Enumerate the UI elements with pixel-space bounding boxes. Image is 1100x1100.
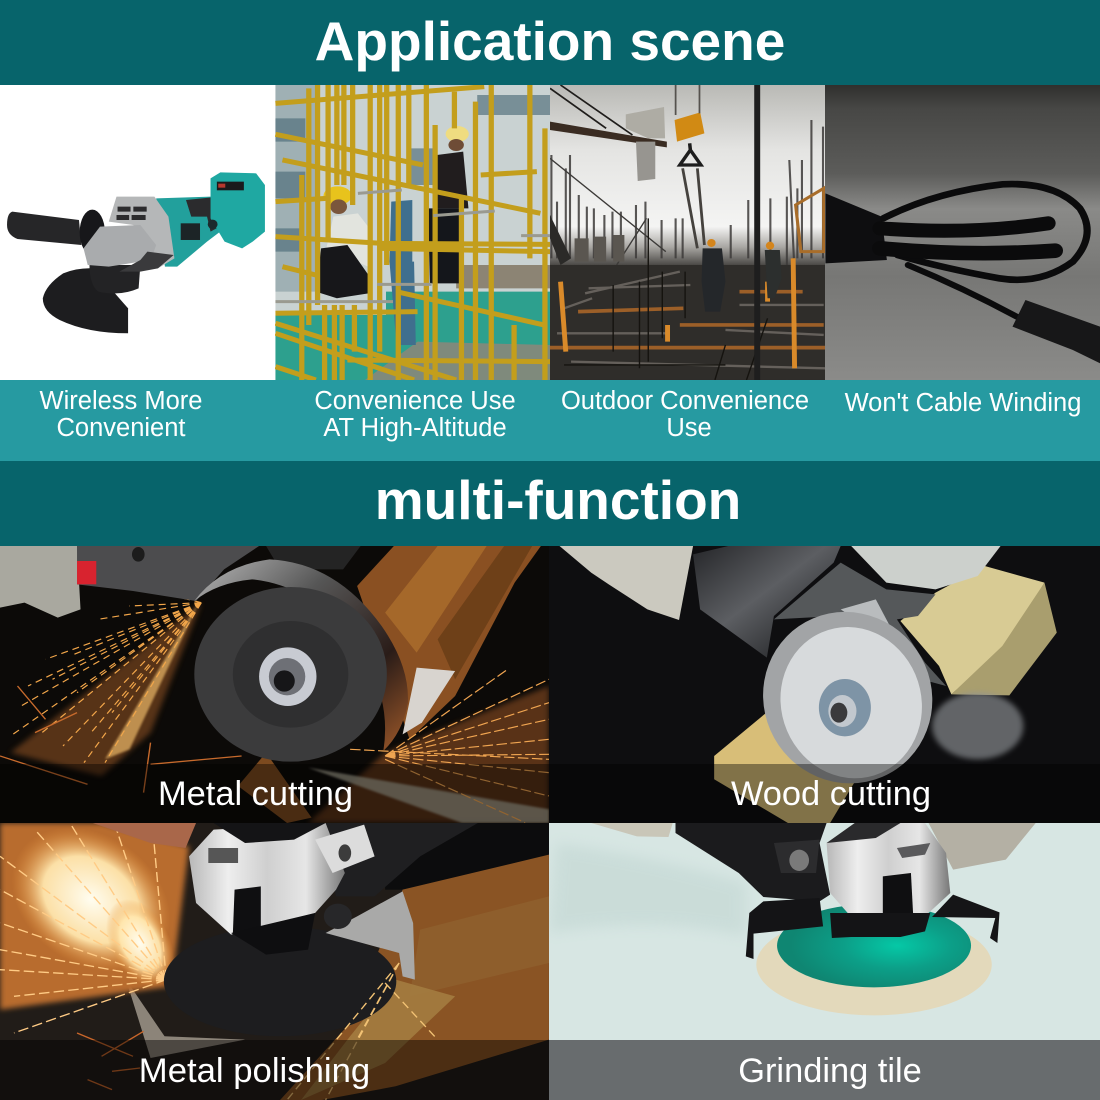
icon: seated worker — [320, 186, 368, 298]
panel: metal cutting photo — [0, 546, 549, 823]
icon: grinder head chrome — [827, 823, 950, 913]
icon: glove — [0, 546, 81, 618]
icon: motor housing — [77, 546, 259, 601]
icon: logo tag — [181, 223, 200, 240]
icon: grinder body — [676, 823, 830, 901]
icon: yellow lifting clamp — [675, 112, 704, 142]
icon: spindle and screws — [231, 913, 315, 955]
icon: white disc — [746, 597, 949, 798]
icon: worker in middle — [389, 200, 416, 345]
caption: Grinding tile: Grinding tile — [738, 1052, 922, 1090]
icon: flange — [80, 210, 104, 250]
icon: gear head lower — [84, 225, 156, 267]
icon: lower wood block — [714, 709, 858, 823]
sparks left — [11, 589, 201, 763]
header band: multi-function: multi-function — [375, 469, 741, 531]
panel: wood cutting photo — [549, 546, 1100, 823]
icon: workers on deck — [702, 239, 782, 312]
icon: spindle — [89, 265, 140, 294]
sparks right — [350, 669, 549, 823]
rebar deck — [550, 265, 825, 380]
icon: wheel guard — [43, 268, 128, 333]
caption: Won't Cable Winding: Won't Cable Winding — [845, 389, 1081, 417]
icon: scaffold tower — [796, 188, 824, 252]
sparks right — [287, 963, 438, 1100]
icon: cable coil — [825, 184, 1087, 317]
icon: distant columns — [575, 235, 624, 262]
caption: Wireless More Convenient: Convenient — [56, 414, 186, 442]
caption: Metal cutting: Metal cutting — [158, 775, 353, 813]
spark fan — [0, 823, 189, 1010]
icon: standing worker — [428, 126, 469, 283]
icon: dust cloud — [932, 693, 1023, 759]
caption band — [0, 380, 1100, 461]
caption: Convenience Use AT High-Altitude: AT High-Altitude — [323, 414, 507, 442]
icon: grinder head chrome — [189, 823, 375, 935]
icon: gear head upper with vents — [109, 197, 174, 268]
icon: glove left — [560, 546, 693, 620]
icon: steel beam — [357, 546, 541, 739]
caption: Wood cutting: Wood cutting — [731, 775, 931, 813]
soft shadow on tile — [549, 843, 746, 936]
icon: guard right — [932, 895, 999, 943]
icon: motor housing — [693, 546, 841, 658]
spark glow — [11, 603, 201, 776]
icon: display — [217, 182, 244, 190]
icon: tall black pole — [754, 85, 760, 380]
caption: Outdoor Convenience Use: Outdoor Convenience — [561, 387, 809, 415]
icon: glove right — [929, 823, 1036, 870]
icon: rusty steel plate — [280, 855, 549, 1100]
header band: Application scene — [0, 0, 1100, 85]
icon: glove right — [851, 546, 1001, 589]
icon: felt polishing pad — [756, 904, 992, 1015]
panel: metal polishing photo — [0, 798, 549, 1100]
icon: concrete block — [626, 107, 665, 138]
caption: Metal polishing: Metal polishing — [139, 1052, 370, 1090]
caption: Convenience Use AT High-Altitude: Convenience Use — [314, 387, 516, 415]
icon: bare metal corner — [126, 980, 245, 1058]
rebar forest — [550, 120, 824, 265]
caption: Wireless More Convenient: Wireless More — [40, 387, 202, 415]
icon: upper wood block — [900, 566, 1057, 695]
panel: cordless angle grinder product photo — [7, 172, 265, 334]
icon: guard left — [746, 898, 823, 959]
icon: teal motor body — [156, 196, 219, 267]
icon: neck dark — [315, 823, 478, 896]
icon: dusty guard — [774, 563, 946, 686]
icon: battery housing — [211, 172, 265, 248]
icon: disc guard rim — [194, 559, 408, 751]
header band: Application scene: Application scene — [315, 10, 785, 72]
icon: cutting disc — [194, 587, 387, 762]
icon: hook triangle — [680, 143, 701, 165]
panel: grinding tile photo — [549, 823, 1100, 1100]
workers — [316, 126, 469, 345]
icon: strain relief connector — [1012, 300, 1100, 363]
panel: scaffolding high-altitude photo — [275, 85, 551, 380]
panel: black power cable photo — [825, 85, 1100, 380]
icon: glove edge — [93, 823, 196, 848]
caption: Outdoor Convenience Use: Use — [666, 414, 712, 442]
panel: outdoor construction site photo — [550, 85, 825, 380]
icon: spindle collar — [830, 913, 930, 938]
header band: multi-function — [0, 461, 1100, 546]
icon: guard silver — [326, 891, 415, 980]
icon: crane arm — [550, 122, 667, 147]
icon: glove left — [591, 823, 673, 837]
icon: polishing disc — [164, 926, 396, 1036]
icon: side handle — [7, 212, 81, 245]
